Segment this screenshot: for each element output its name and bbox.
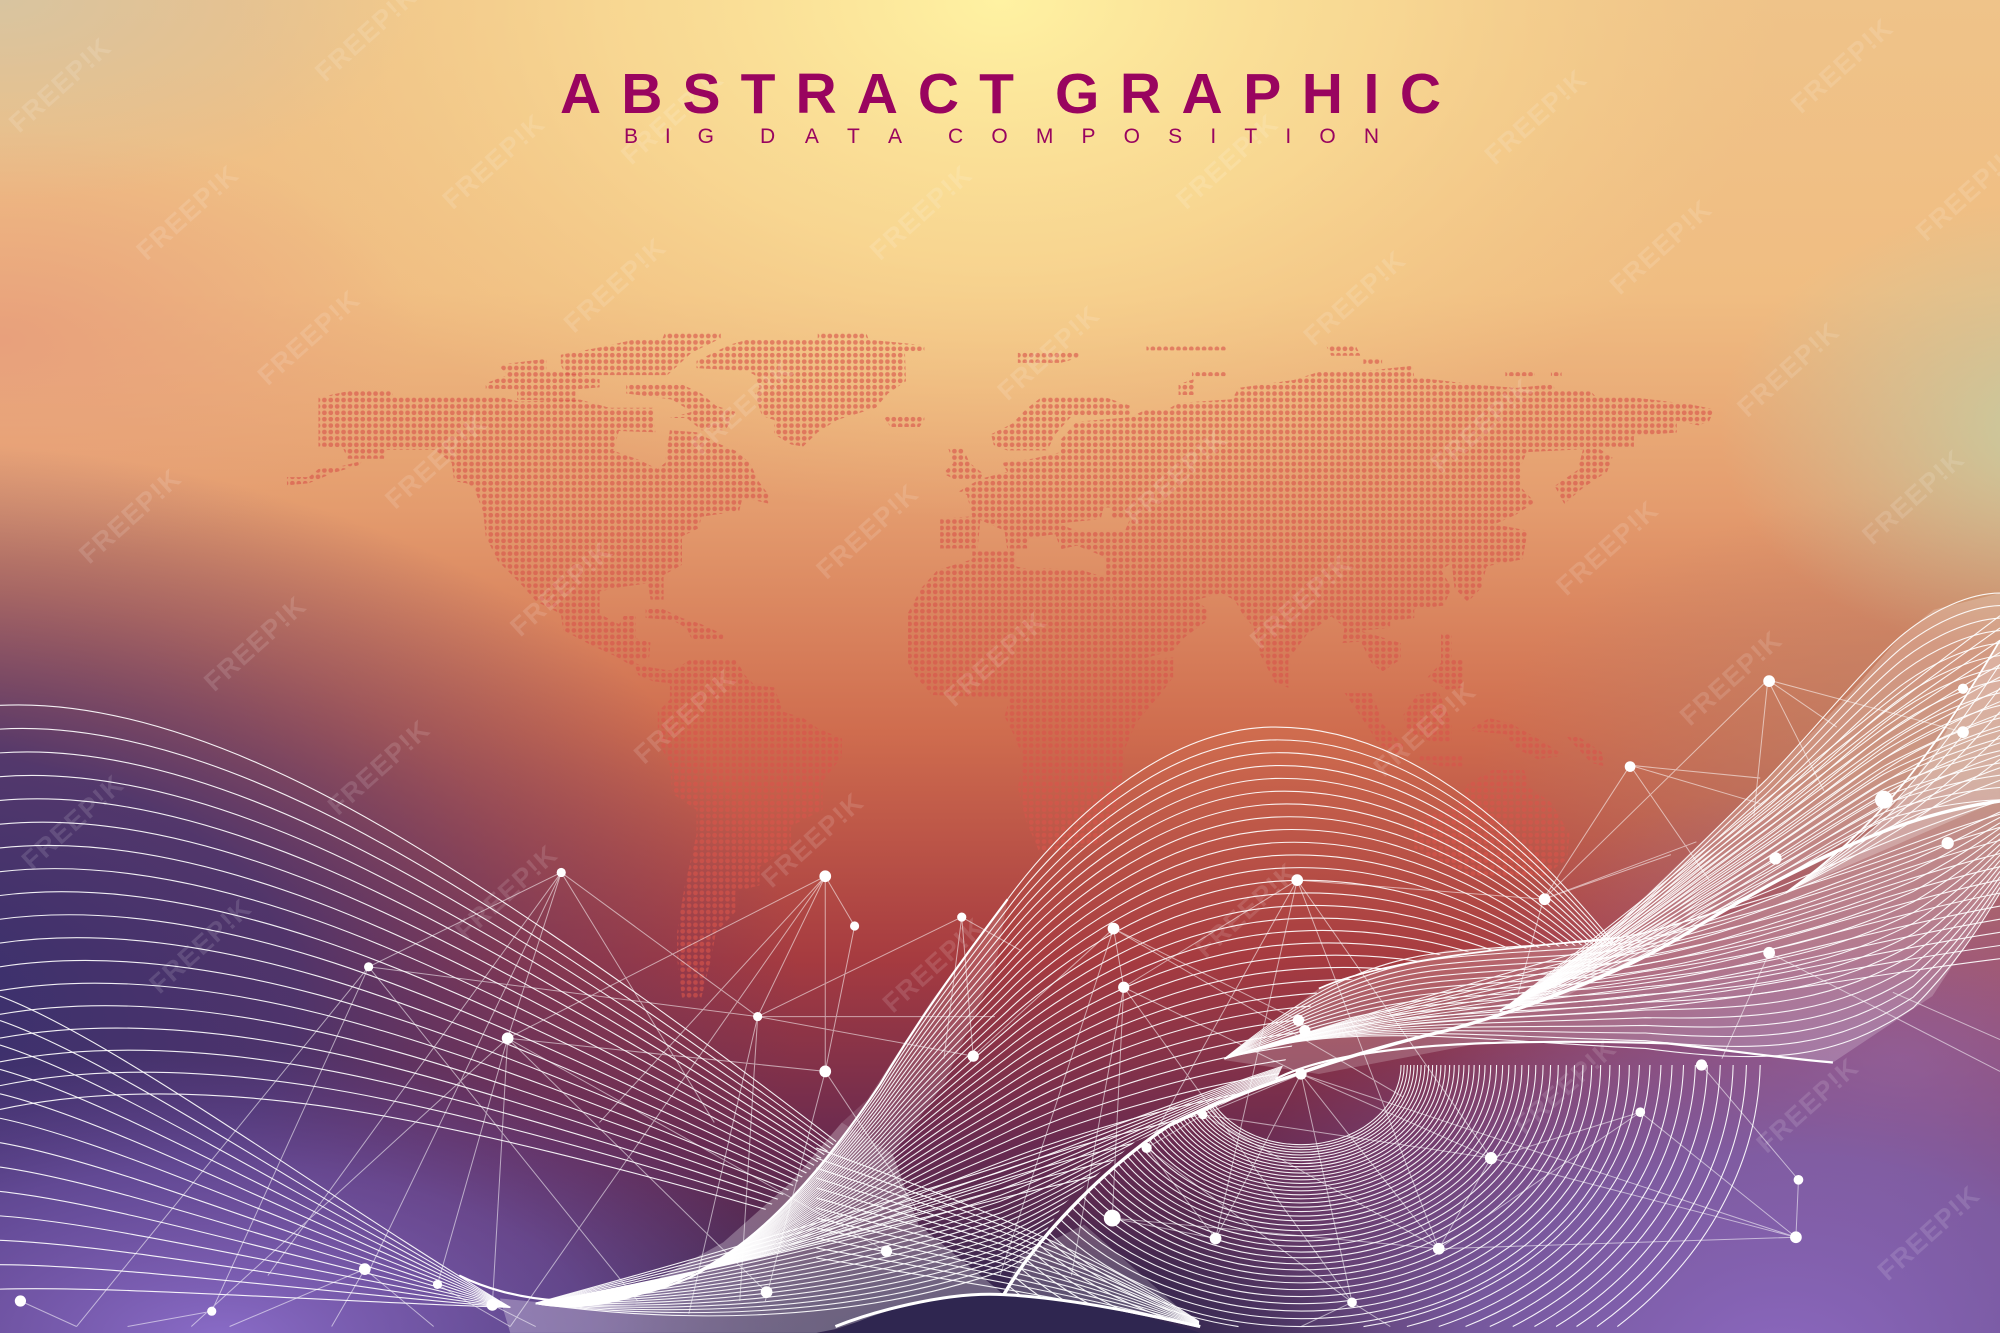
stock watermarks: FREEP!K [1119, 423, 1233, 530]
wave: upper right band [1500, 593, 2000, 1012]
stock watermarks: FREEP!K [131, 159, 245, 266]
stock watermarks: FREEP!K [1425, 372, 1539, 479]
stock watermarks: FREEP!K [252, 284, 366, 391]
stock watermarks: FREEP!K [3, 31, 117, 138]
wave: mesh descending to the lower edge [816, 1148, 1199, 1327]
wave: lower right concentric bowls [1010, 1065, 1761, 1328]
stock watermarks: FREEP!K [1731, 316, 1845, 423]
subtitle: DATA [760, 125, 902, 148]
stock watermarks: FREEP!K [449, 839, 564, 946]
stock watermarks: FREEP!K [1674, 625, 1788, 731]
stock watermarks: FREEP!K [864, 159, 978, 266]
title block [560, 62, 1441, 148]
stock watermarks: FREEP!K [198, 590, 312, 697]
stock watermarks: FREEP!K [143, 892, 257, 999]
stock watermarks: FREEP!K [615, 63, 729, 170]
stock watermarks: FREEP!K [1479, 63, 1593, 170]
stock watermarks: FREEP!K [877, 912, 991, 1018]
stock watermarks: FREEP!K [73, 463, 187, 570]
network connection lines [20, 680, 2000, 1327]
heading: GRAPHIC [1055, 62, 1441, 126]
stock watermarks: FREEP!K [810, 478, 924, 585]
dark wedge under the lower edge [835, 1294, 1200, 1333]
stock watermarks: FREEP!K [1244, 548, 1358, 655]
stock watermarks: FREEP!K [1368, 676, 1482, 783]
stock watermarks: FREEP!K [558, 232, 672, 339]
stock watermarks: FREEP!K [1604, 193, 1718, 300]
map: the Americas, Greenland and Iceland [287, 332, 924, 998]
stock watermarks: FREEP!K [1751, 1052, 1865, 1159]
stock watermarks: FREEP!K [1170, 108, 1284, 215]
stock watermarks: FREEP!K [504, 535, 618, 642]
stock watermarks: FREEP!K [1856, 443, 1970, 550]
wave: bright band edges [459, 640, 2000, 1327]
stock watermarks: FREEP!K [756, 787, 870, 893]
stock watermarks: FREEP!K [437, 108, 551, 215]
stock watermarks: FREEP!K [628, 663, 742, 770]
map: Europe, Asia, Africa and Australia [908, 345, 1714, 877]
stock watermarks: FREEP!K [322, 714, 436, 821]
stock watermarks: FREEP!K [1298, 245, 1412, 351]
stock watermarks: FREEP!K [685, 354, 799, 461]
dotted world map [287, 332, 1714, 998]
wave: left lower fan [0, 996, 510, 1333]
wave: dense mesh haze [500, 593, 2000, 1333]
stock watermarks: FREEP!K [1508, 1033, 1622, 1140]
wave: central hump and rising flank [536, 727, 1620, 1307]
stock watermarks: FREEP!K [1189, 857, 1303, 964]
wave: left upper fan [0, 704, 836, 1210]
subtitle: BIG [624, 125, 714, 148]
stock watermarks: FREEP!K [1785, 12, 1899, 119]
white wave bands [0, 593, 2000, 1333]
stock watermarks: FREEP!K [16, 769, 130, 876]
stock watermarks: FREEP!K [992, 299, 1106, 406]
subtitle: COMPOSITION [948, 125, 1379, 148]
stock watermarks: FREEP!K [1550, 495, 1664, 601]
network nodes [15, 675, 1969, 1316]
stock watermarks: FREEP!K [379, 408, 493, 515]
stock watermarks: FREEP!K [938, 605, 1052, 712]
wave: flat lens band [1224, 801, 2000, 1059]
heading: ABSTRACT [560, 62, 1014, 126]
stock watermarks: FREEP!K [1872, 1179, 1986, 1286]
wave: mesh rising from the neck [536, 1066, 1283, 1316]
